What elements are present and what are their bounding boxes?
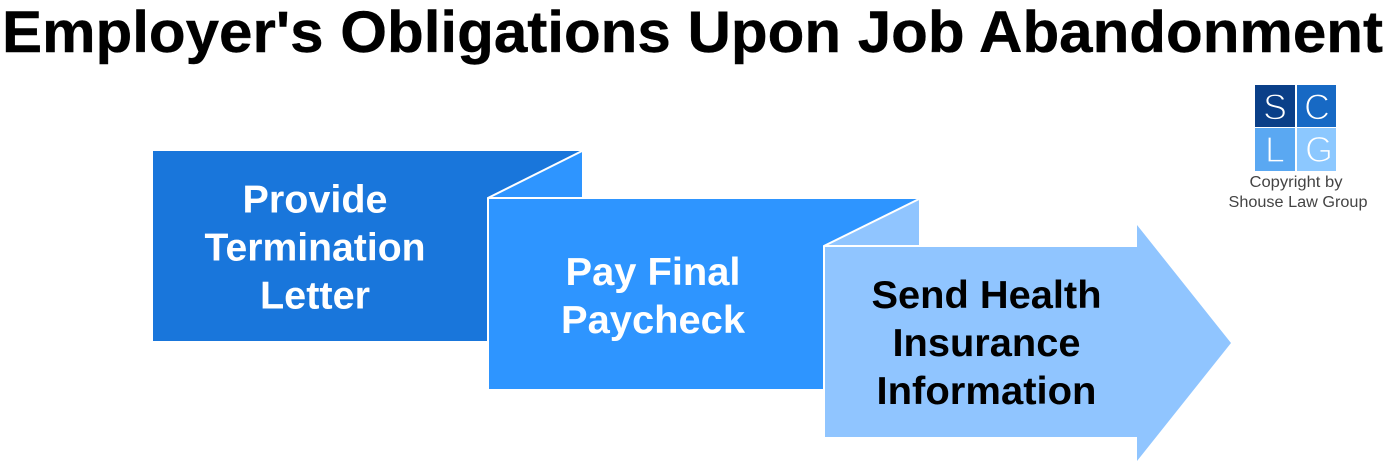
copyright note: [1228, 174, 1368, 211]
step 3: send health insurance information arrow: Insurance: [892, 322, 1080, 365]
step 1: provide termination letter: [153, 151, 582, 341]
step 3: send health insurance information arrow: [488, 198, 1231, 461]
logo: SCLG: G: [1305, 129, 1333, 170]
copyright note: Copyright by: [1250, 174, 1343, 191]
step 1: provide termination letter: Provide: [242, 178, 388, 222]
logo: SCLG: C: [1304, 86, 1330, 128]
step 3: send health insurance information arrow: Information: [876, 370, 1096, 413]
step 1: provide termination letter: Letter: [260, 274, 370, 318]
step 2: pay final paycheck: [488, 151, 919, 389]
step 1: provide termination letter: Termination: [204, 226, 426, 270]
logo: SCLG: L: [1265, 129, 1285, 170]
step 3: send health insurance information arrow: Send Health: [872, 274, 1102, 317]
copyright note: Shouse Law Group: [1228, 194, 1368, 211]
logo: SCLG: [1255, 85, 1336, 171]
step 2: pay final paycheck: Pay Final: [566, 251, 740, 294]
logo: SCLG: S: [1263, 86, 1287, 128]
title: Employer's Obligations Upon Job Abandonment: [2, 0, 1383, 65]
step 2: pay final paycheck: Paycheck: [561, 299, 746, 342]
